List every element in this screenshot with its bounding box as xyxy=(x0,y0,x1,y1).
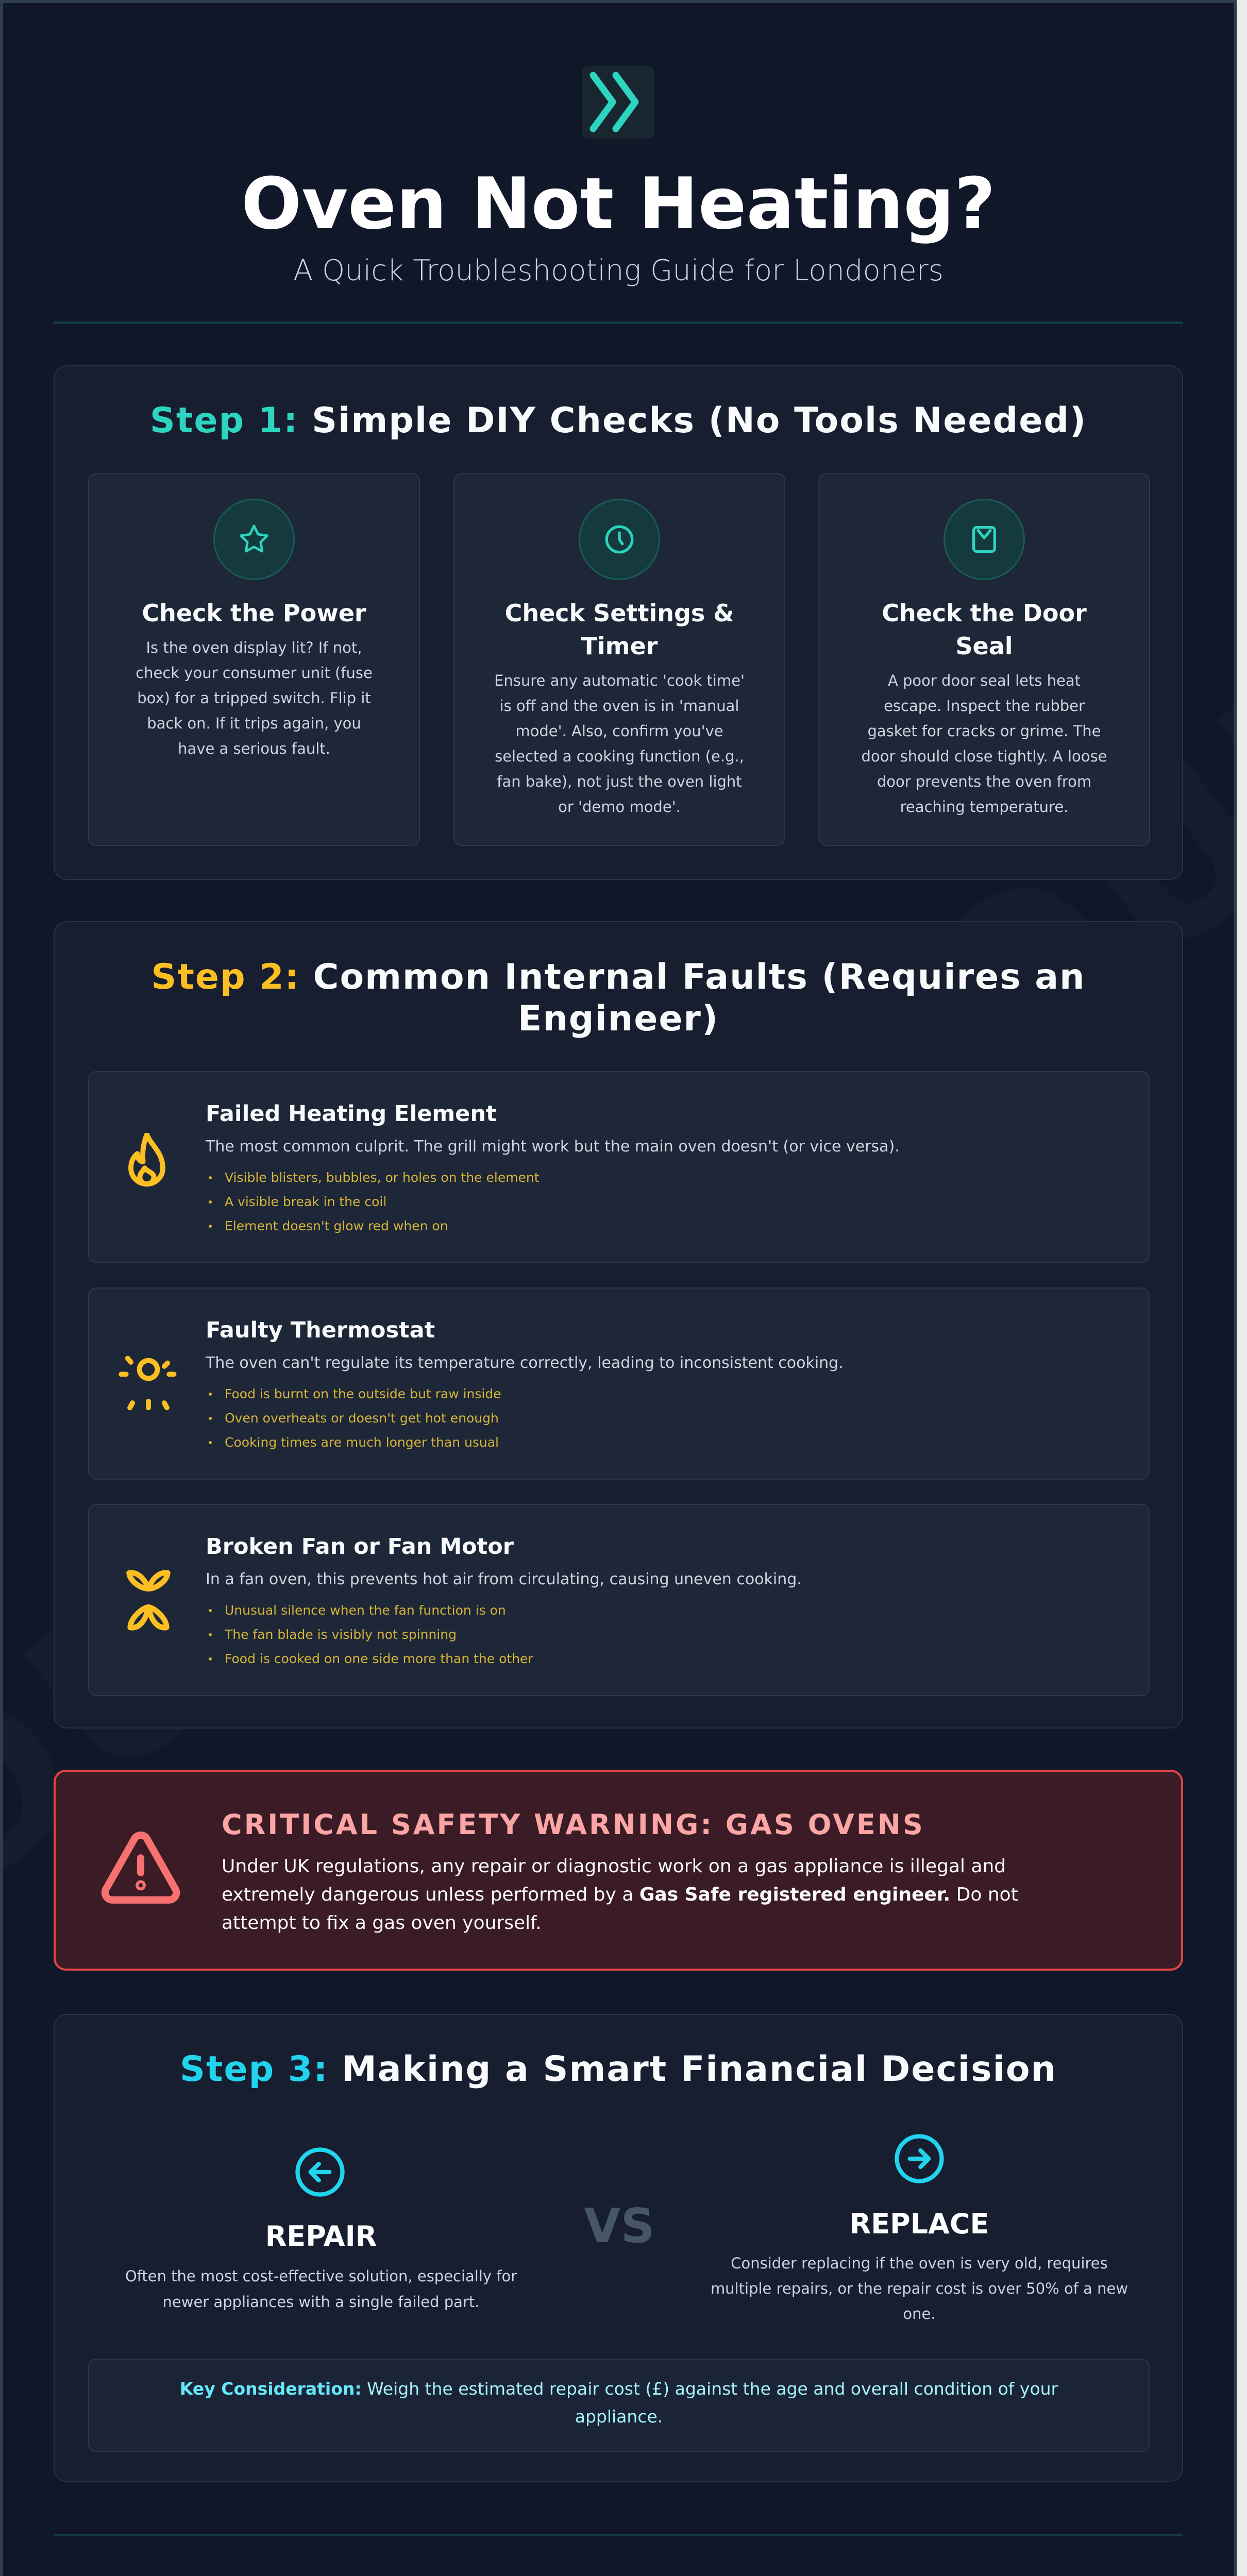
card: check door seal: Check the Door xyxy=(882,599,1087,627)
card: thermostat xyxy=(88,1287,1150,1480)
card: fan: The fan blade is visibly not spinning xyxy=(225,1627,457,1642)
title: Oven Not Heating? xyxy=(241,162,996,245)
panel: step 2 xyxy=(54,921,1183,1728)
warning body xyxy=(222,1856,1018,1934)
card: check the power: back on. If it trips again, you xyxy=(147,715,361,732)
panel: step 1 xyxy=(54,365,1183,880)
card: check door seal xyxy=(818,473,1150,846)
card: check door seal: reaching temperature. xyxy=(900,798,1068,816)
card: check door seal: Seal xyxy=(955,632,1013,660)
key consideration: Key Consideration: Weigh the estimated repair cost (£) against the age and overall condition of your xyxy=(180,2379,1058,2399)
replace column: multiple repairs, or the repair cost is over 50% of a new xyxy=(711,2280,1128,2297)
warning title: CRITICAL SAFETY WARNING: GAS OVENS xyxy=(222,1808,925,1841)
warning body: Under UK regulations, any repair or diagnostic work on a gas appliance is illegal and xyxy=(222,1856,1006,1877)
card: check door seal: door prevents the oven from xyxy=(877,773,1091,790)
panel: safety warning xyxy=(54,1770,1183,1971)
icon: fan xyxy=(126,1570,171,1631)
card: check door seal: door should close tightly. A loose xyxy=(862,748,1107,765)
card: check the power: box) for a tripped switch. Flip it xyxy=(137,689,371,707)
card: check settings: Check Settings & xyxy=(505,599,734,627)
card: check the power xyxy=(88,473,420,846)
card: check settings: or 'demo mode'. xyxy=(558,798,681,816)
card: check door seal: gasket for cracks or grime. The xyxy=(867,722,1101,740)
card: thermostat: The oven can't regulate its temperature correctly, leading to inconsistent cooking. xyxy=(206,1354,844,1372)
card: check settings: Ensure any automatic 'cook time' xyxy=(494,672,745,689)
heading: step 1: Step 1: Simple DIY Checks (No Tools Needed) xyxy=(150,400,1087,441)
icon: logo xyxy=(582,66,654,139)
heading: step 2 xyxy=(151,957,1086,1039)
card: thermostat: Cooking times are much longer than usual xyxy=(225,1435,499,1450)
repair column: REPAIR xyxy=(265,2220,377,2252)
icon: star xyxy=(213,499,295,580)
card: check settings: is off and the oven is in 'manual xyxy=(500,697,739,715)
heading: step 2: Engineer) xyxy=(518,998,719,1039)
repair column xyxy=(125,2147,517,2311)
card: check door seal: A poor door seal lets heat xyxy=(888,672,1081,689)
card: heating element: The most common culprit. The grill might work but the main oven doesn't (or vice versa). xyxy=(206,1138,900,1156)
icon: arrow left xyxy=(295,2147,345,2197)
card: check settings: fan bake), not just the oven light xyxy=(497,773,742,790)
icon: thermostat xyxy=(119,1356,176,1411)
subtitle: A Quick Troubleshooting Guide for Londoners xyxy=(293,254,943,287)
key consideration xyxy=(88,2359,1150,2452)
replace column: Consider replacing if the oven is very old, requires xyxy=(731,2255,1108,2272)
card: heating element: Element doesn't glow red when on xyxy=(225,1218,448,1233)
warning body: attempt to fix a gas oven yourself. xyxy=(222,1912,542,1934)
card: check settings: selected a cooking function (e.g., xyxy=(495,748,744,765)
card: check the power: Is the oven display lit? If not, xyxy=(146,639,362,656)
card: check settings xyxy=(453,473,785,846)
card: heating element: Visible blisters, bubbles, or holes on the element xyxy=(225,1170,540,1185)
card: thermostat: Faulty Thermostat xyxy=(206,1317,435,1343)
heading: step 3: Step 3: Making a Smart Financial Decision xyxy=(180,2049,1057,2090)
heading: step 2: Step 2: Common Internal Faults (Requires an xyxy=(151,957,1086,997)
repair column: Often the most cost-effective solution, especially for xyxy=(125,2267,517,2285)
card: check door seal: escape. Inspect the rubber xyxy=(884,697,1085,715)
icon: arrow right xyxy=(895,2134,944,2183)
card: check settings: Timer xyxy=(581,632,658,660)
card: check settings: mode'. Also, confirm you've xyxy=(515,722,723,740)
panel: step 3: one. xyxy=(903,2305,936,2323)
card: thermostat: Oven overheats or doesn't get hot enough xyxy=(225,1411,499,1426)
icon: warning triangle xyxy=(101,1832,180,1904)
key consideration: appliance. xyxy=(575,2406,663,2427)
warning body: extremely dangerous unless performed by a Gas Safe registered engineer. Do not xyxy=(222,1884,1018,1905)
card: heating element: Failed Heating Element xyxy=(206,1101,497,1127)
card: thermostat: Food is burnt on the outside but raw inside xyxy=(225,1386,501,1401)
card: fan xyxy=(88,1504,1150,1696)
panel: step 3 xyxy=(54,2014,1183,2482)
card: fan: Broken Fan or Fan Motor xyxy=(206,1534,514,1560)
icon: door xyxy=(943,499,1025,580)
icon: clock xyxy=(579,499,660,580)
card: check the power: check your consumer unit (fuse xyxy=(136,664,373,682)
replace column xyxy=(711,2134,1128,2323)
card: heating element: A visible break in the coil xyxy=(225,1194,386,1209)
card: check the power: have a serious fault. xyxy=(178,740,330,757)
card: fan: In a fan oven, this prevents hot air from circulating, causing uneven cooking. xyxy=(206,1570,802,1588)
card: heating element xyxy=(88,1071,1150,1263)
replace column: REPLACE xyxy=(850,2208,989,2240)
repair column: newer appliances with a single failed part. xyxy=(163,2293,479,2311)
icon: flame xyxy=(128,1133,165,1187)
card: fan: Food is cooked on one side more than the other xyxy=(225,1651,533,1666)
card: fan: Unusual silence when the fan function is on xyxy=(225,1603,506,1618)
card: check the power: Check the Power xyxy=(142,599,366,627)
vs: VS xyxy=(584,2198,655,2253)
